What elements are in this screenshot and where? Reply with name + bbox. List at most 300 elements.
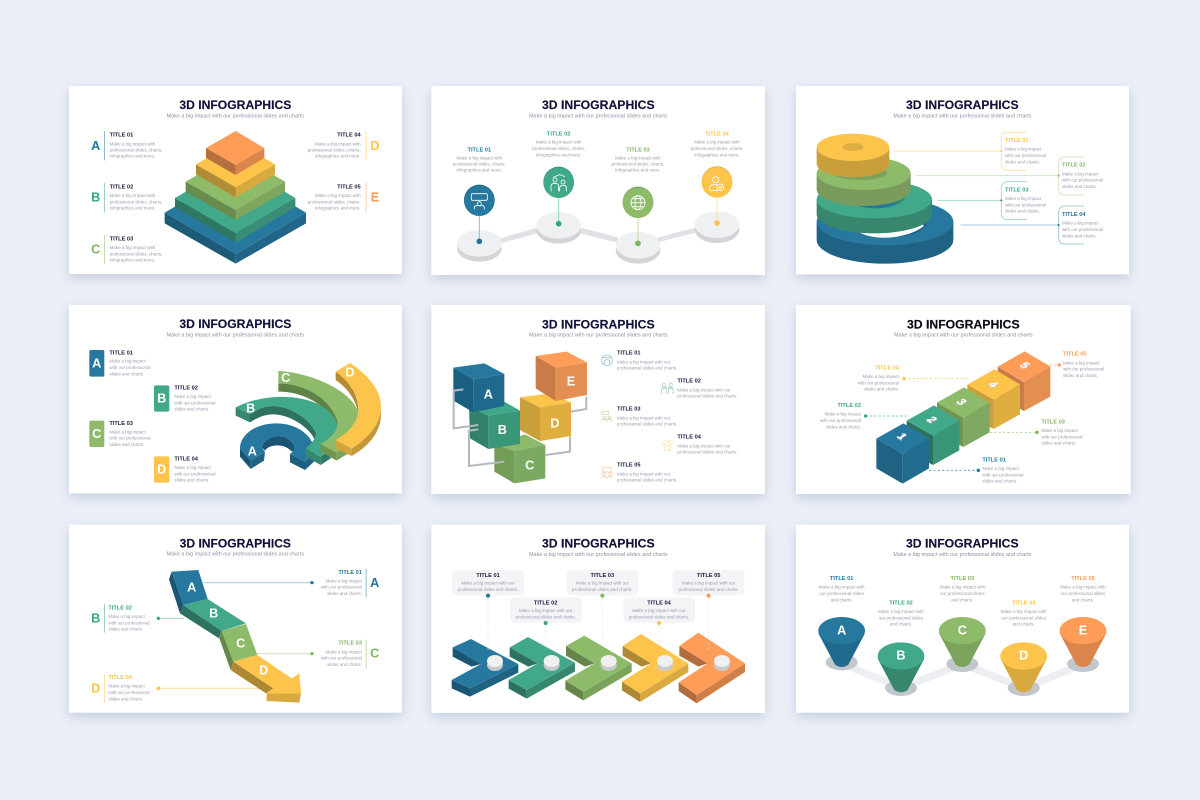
subtitle: Make a big impact with our professional slides and charts <box>167 552 304 558</box>
step 3: professional slides, charts, <box>612 162 664 167</box>
subtitle: Make a big impact with our professional slides and charts <box>529 114 668 120</box>
item 03: Make a big impact with our <box>617 415 671 420</box>
item D: D <box>370 139 380 153</box>
cube 4: 4 <box>984 381 1002 391</box>
heading: 3D INFOGRAPHICS <box>906 536 1019 550</box>
leader lines <box>158 583 312 688</box>
cube E: E <box>567 375 575 389</box>
step 4: professional slides, charts, <box>691 146 743 151</box>
cone C: and charts. <box>951 597 973 602</box>
item A <box>91 131 163 160</box>
cone B: B <box>896 649 906 663</box>
cube 3: 3 <box>953 398 970 408</box>
note 03 <box>1035 419 1082 446</box>
item 02: Make a big impact with our <box>677 387 731 392</box>
label 02 <box>510 597 582 625</box>
item C: Make a big impact <box>109 429 146 434</box>
step 2: Make a big impact with <box>536 140 582 145</box>
callout 04: TITLE 04 <box>1062 212 1086 218</box>
label 01: professional slides and charts. <box>458 587 518 592</box>
label 02: Make a big impact with our <box>519 608 573 613</box>
item 05: Make a big impact with our <box>617 472 671 477</box>
icon: team orange <box>601 467 613 478</box>
callout 04 <box>1058 206 1103 244</box>
item 03 <box>601 407 677 427</box>
note A: with our professional <box>321 585 362 590</box>
label 03: Make a big impact with our <box>576 581 630 586</box>
subtitle: Make a big impact with our professional slides and charts <box>893 552 1032 558</box>
step 1: infographics and more. <box>457 168 502 173</box>
step 4: Make a big impact with <box>694 140 740 145</box>
note 02: with our professional <box>820 418 861 423</box>
item A: professional slides, charts, <box>110 148 163 153</box>
icon: team green <box>662 383 673 394</box>
item E: TITLE 05 <box>337 185 361 191</box>
chevron 3 <box>565 636 632 700</box>
arc D: D <box>345 366 355 380</box>
cone B: TITLE 02 <box>889 600 913 606</box>
arc B: B <box>246 401 255 415</box>
icon: globe <box>631 196 645 210</box>
subtitle: Make a big impact with our professional slides and charts <box>529 333 668 339</box>
item 05: professional slides and charts. <box>617 478 677 483</box>
item E: infographics and more. <box>315 206 361 211</box>
note 04 <box>858 365 906 392</box>
note 01: TITLE 01 <box>982 457 1006 463</box>
label 03: TITLE 03 <box>591 573 614 579</box>
arc D <box>336 363 381 456</box>
step 1: TITLE 01 <box>468 147 491 153</box>
item C: infographics and more. <box>110 258 155 263</box>
item D: D <box>157 463 166 477</box>
cone B <box>878 600 924 696</box>
icon: team light green <box>601 412 612 422</box>
cone A <box>818 576 865 670</box>
note C: Make a big impact <box>326 649 363 654</box>
cone D: our professional slides <box>1001 615 1047 620</box>
heading: 3D INFOGRAPHICS <box>179 317 291 331</box>
cube A: A <box>484 388 493 402</box>
dashed guides <box>488 597 709 652</box>
callout 01: Make a big impact <box>1005 147 1042 152</box>
icon: presenter <box>471 194 487 209</box>
note 05 <box>1058 352 1104 378</box>
callout 01: with our professional <box>1005 153 1046 158</box>
callout 03 <box>1000 182 1046 220</box>
panel: floating cubes <box>431 305 765 494</box>
cone D: D <box>1019 649 1028 663</box>
item C: Make a big impact with <box>110 245 156 250</box>
connector lines <box>894 151 1059 225</box>
icon: team <box>551 175 566 191</box>
item A: Make a big impact <box>109 359 146 364</box>
item A: slides and charts. <box>109 371 144 376</box>
note 04: Make a big impact <box>863 374 900 379</box>
item 05: TITLE 05 <box>617 463 641 469</box>
note 02: Make a big impact <box>825 412 862 417</box>
step 2: professional slides, charts, <box>532 146 585 151</box>
label 03: professional slides and charts. <box>572 587 632 592</box>
cone C: C <box>958 623 967 637</box>
label 03 <box>567 570 638 598</box>
note 04: slides and charts. <box>864 387 899 392</box>
item 01 <box>602 351 677 371</box>
3D stepped pyramid <box>165 131 306 264</box>
cube 3 <box>937 387 990 447</box>
note B: slides and charts. <box>108 627 143 632</box>
note 03: with our professional <box>1041 434 1082 439</box>
note C: slides and charts. <box>327 662 362 667</box>
item B: B <box>157 392 166 406</box>
cone A: Make a big impact with <box>819 585 865 590</box>
arc A <box>240 423 314 470</box>
3D arc chart <box>236 363 381 470</box>
cone C: Make a big impact with <box>940 585 986 590</box>
cube 2: 2 <box>923 416 940 426</box>
item A: TITLE 01 <box>109 350 133 356</box>
item B: professional slides, charts, <box>110 199 163 204</box>
note 02 <box>820 403 867 429</box>
item A <box>89 350 150 377</box>
panel: numbered staircase cubes <box>796 305 1131 494</box>
note D: TITLE 04 <box>108 675 133 681</box>
cube 1 <box>876 423 929 484</box>
label 01: TITLE 01 <box>476 573 500 579</box>
icon: team yellow <box>661 440 673 451</box>
label 02: TITLE 02 <box>534 600 557 606</box>
segment A: A <box>187 581 196 595</box>
step 2: infographics and more. <box>536 152 581 157</box>
dashed leaders <box>866 365 1059 470</box>
step 3: infographics and more. <box>615 168 661 173</box>
floor bands <box>842 663 1083 688</box>
ring: green <box>817 178 932 233</box>
callout 02 <box>1058 157 1103 195</box>
note A: A <box>370 576 379 590</box>
cube 5 <box>998 351 1050 411</box>
subtitle: Make a big impact with our professional slides and charts <box>894 333 1033 339</box>
chevron 1 <box>452 639 518 697</box>
step 3: TITLE 03 <box>626 147 650 153</box>
segment B: B <box>209 606 218 620</box>
cube 1: 1 <box>893 431 911 441</box>
label 05: professional slides and charts. <box>678 587 739 592</box>
note 03: Make a big impact <box>1041 428 1078 433</box>
stacked rings chart <box>817 134 953 264</box>
item 03: professional slides and charts. <box>617 422 677 427</box>
connector brackets <box>454 389 586 466</box>
step 3: Make a big impact with <box>615 155 661 160</box>
item C: slides and charts. <box>109 442 144 447</box>
cube 4: 4 <box>984 380 1002 390</box>
item 02 <box>662 379 738 399</box>
callout 01: slides and charts. <box>1005 159 1040 164</box>
cube B: B <box>498 423 507 437</box>
note B: Make a big impact <box>108 614 145 619</box>
step 4: infographics and more. <box>694 152 740 157</box>
cone A: our professional slides <box>819 591 865 596</box>
callout 03: with our professional <box>1005 202 1046 207</box>
label 04 <box>623 597 695 625</box>
cone B: our professional slides <box>879 615 924 620</box>
item 04: professional slides and charts. <box>677 450 738 455</box>
cone B: and charts. <box>890 622 912 627</box>
note 01 <box>977 457 1023 484</box>
note 05: with our professional <box>1063 367 1104 372</box>
item 01: Make a big impact with our <box>617 359 671 364</box>
item D: professional slides, charts, <box>308 148 361 153</box>
item E: E <box>371 191 379 205</box>
cube 3: 3 <box>953 397 970 407</box>
panel: cones <box>796 525 1129 713</box>
note D: with our professional <box>108 690 149 695</box>
item 01: professional slides and charts. <box>617 366 677 371</box>
item D: Make a big impact with <box>315 141 361 146</box>
item D: with our professional <box>174 471 215 476</box>
arc A: A <box>248 444 257 458</box>
cone A: and charts. <box>831 597 853 602</box>
ring: blue <box>817 198 953 264</box>
note 05: TITLE 05 <box>1063 352 1087 358</box>
step 1: professional slides, charts, <box>453 162 506 167</box>
callout 03: Make a big impact <box>1005 196 1042 201</box>
cone C: our professional slides <box>940 591 985 596</box>
step 2: TITLE 02 <box>547 131 570 137</box>
heading: 3D INFOGRAPHICS <box>542 536 655 550</box>
note A <box>310 569 379 597</box>
item C: professional slides, charts, <box>110 251 163 256</box>
cone E: TITLE 05 <box>1071 576 1095 582</box>
item B: infographics and more. <box>110 206 155 211</box>
cone D: and charts. <box>1013 622 1035 627</box>
note 05: slides and charts. <box>1063 373 1098 378</box>
item A: TITLE 01 <box>110 133 133 139</box>
item E: Make a big impact with <box>315 193 361 198</box>
step 3 <box>612 147 664 264</box>
subtitle: Make a big impact with our professional slides and charts <box>893 113 1032 119</box>
heading: 3D INFOGRAPHICS <box>542 98 655 112</box>
note B: B <box>91 612 100 626</box>
cone E: our professional slides <box>1061 591 1106 596</box>
cone C: TITLE 03 <box>951 576 974 582</box>
cone D: TITLE 04 <box>1012 600 1036 606</box>
callout 03: TITLE 03 <box>1005 187 1029 193</box>
note D: D <box>91 681 100 695</box>
note 04: with our professional <box>858 380 899 385</box>
subtitle: Make a big impact with our professional slides and charts <box>167 113 304 119</box>
note 04: TITLE 04 <box>875 365 900 371</box>
cube 4 <box>967 369 1020 429</box>
cube staircase <box>876 351 1050 484</box>
callout 02: TITLE 02 <box>1062 163 1086 169</box>
callout 02: with our professional <box>1062 178 1103 183</box>
note 03: slides and charts. <box>1041 441 1076 446</box>
item 04: Make a big impact with our <box>677 444 731 449</box>
label 05 <box>673 570 744 598</box>
label 05: TITLE 05 <box>697 573 720 579</box>
item B <box>154 385 215 412</box>
label 01: Make a big impact with our <box>461 581 515 586</box>
label 04: TITLE 04 <box>647 600 672 606</box>
item D: TITLE 04 <box>174 456 199 462</box>
item D: TITLE 04 <box>337 133 362 139</box>
note C: C <box>370 647 379 661</box>
item C: C <box>91 242 100 256</box>
note 02: slides and charts. <box>826 424 861 429</box>
callout 03: slides and charts. <box>1005 209 1040 214</box>
cone E: Make a big impact with <box>1060 585 1106 590</box>
item 04: TITLE 04 <box>677 435 702 441</box>
note 03: TITLE 03 <box>1041 419 1065 425</box>
panel: timeline discs <box>431 86 765 275</box>
heading: 3D INFOGRAPHICS <box>906 98 1019 112</box>
note D: Make a big impact <box>108 684 145 689</box>
subtitle: Make a big impact with our professional slides and charts <box>167 332 304 338</box>
label 05: Make a big impact with our <box>682 581 736 586</box>
step 4 <box>691 131 743 243</box>
item A: Make a big impact with <box>110 141 156 146</box>
callout 01 <box>1000 132 1046 170</box>
item E <box>308 183 379 212</box>
note C <box>310 640 379 668</box>
item A: A <box>92 357 101 371</box>
note 02: TITLE 02 <box>837 403 861 409</box>
item 02: TITLE 02 <box>677 379 701 385</box>
arc C: C <box>281 371 290 385</box>
item A: infographics and more. <box>110 154 155 159</box>
cube D: D <box>550 417 560 431</box>
note 05: Make a big impact <box>1063 360 1100 365</box>
cube chart <box>453 352 587 483</box>
note C: with our professional <box>321 656 362 661</box>
item D: slides and charts. <box>174 478 209 483</box>
note 01: Make a big impact <box>982 466 1019 471</box>
heading: 3D INFOGRAPHICS <box>542 317 655 331</box>
cube C: C <box>525 459 534 473</box>
cone A: TITLE 01 <box>830 576 853 582</box>
item C: TITLE 03 <box>109 421 133 427</box>
item 04 <box>661 435 738 455</box>
label 02: professional slides and charts. <box>516 614 576 619</box>
item 05 <box>601 463 677 483</box>
note D: slides and charts. <box>108 696 143 701</box>
item C: with our professional <box>109 436 150 441</box>
item B: Make a big impact <box>174 394 211 399</box>
chevron 2 <box>509 637 575 699</box>
note 01: slides and charts. <box>982 479 1017 484</box>
arc B <box>236 397 337 465</box>
icon: team blue <box>602 355 612 366</box>
cube 5: 5 <box>1016 361 1033 371</box>
note A: TITLE 01 <box>338 570 362 576</box>
item C <box>89 421 150 447</box>
item A: A <box>91 139 100 153</box>
item B: Make a big impact with <box>110 193 156 198</box>
chevron 5 <box>679 633 745 703</box>
callout 04: Make a big impact <box>1062 221 1099 226</box>
note 01: with our professional <box>982 472 1023 477</box>
cone D: Make a big impact with <box>1001 609 1047 614</box>
item D: infographics and more. <box>315 154 361 159</box>
item E: professional slides, charts, <box>308 199 361 204</box>
label 04: professional slides and charts. <box>629 614 689 619</box>
item B: B <box>91 191 100 205</box>
callout 01: TITLE 01 <box>1005 138 1029 144</box>
step 2 <box>532 131 585 244</box>
item D: Make a big impact <box>174 465 211 470</box>
note B <box>91 604 160 633</box>
subtitle: Make a big impact with our professional slides and charts <box>529 552 668 558</box>
step 1 <box>453 147 506 262</box>
cone E: and charts. <box>1072 597 1094 602</box>
step 1: Make a big impact with <box>457 155 503 160</box>
chevron 4 <box>622 634 688 702</box>
item 02: professional slides and charts. <box>677 394 738 399</box>
item B: with our professional <box>174 400 215 405</box>
segment C: C <box>236 637 245 651</box>
item B <box>91 183 163 212</box>
panel: stacked rings <box>796 86 1129 274</box>
cone E: E <box>1079 623 1087 637</box>
callout 02: slides and charts. <box>1062 184 1097 189</box>
item D <box>154 456 215 483</box>
label 01 <box>452 570 524 598</box>
callout 02: Make a big impact <box>1062 171 1099 176</box>
item D <box>308 131 380 160</box>
heading: 3D INFOGRAPHICS <box>180 536 291 550</box>
cone E <box>1060 576 1106 672</box>
step 4: TITLE 04 <box>705 131 730 137</box>
note A: Make a big impact <box>326 579 363 584</box>
note B: TITLE 02 <box>108 606 132 612</box>
item B: TITLE 02 <box>110 185 133 191</box>
ring: yellow <box>817 134 889 177</box>
panel: zigzag arrow <box>69 525 402 713</box>
cube 1: 1 <box>893 432 911 442</box>
panel: curved arcs <box>69 305 402 493</box>
item C: TITLE 03 <box>110 236 133 242</box>
cone C <box>939 576 986 672</box>
note B: with our professional <box>108 620 149 625</box>
item B: TITLE 02 <box>174 385 198 391</box>
cube 5: 5 <box>1016 360 1033 370</box>
cone D <box>1000 600 1047 696</box>
label 04: Make a big impact with our <box>632 608 686 613</box>
note A: slides and charts. <box>327 591 362 596</box>
ring: light green <box>817 157 911 206</box>
segment D arrow: D <box>259 663 268 677</box>
item C: C <box>92 427 101 441</box>
zigzag ribbon <box>169 570 301 703</box>
arc C <box>278 371 358 461</box>
callout 04: with our professional <box>1062 227 1103 232</box>
connector bands <box>500 227 696 243</box>
item 01: TITLE 01 <box>617 351 641 357</box>
heading: 3D INFOGRAPHICS <box>907 317 1020 331</box>
heading: 3D INFOGRAPHICS <box>179 98 291 112</box>
item B: slides and charts. <box>174 407 209 412</box>
panel: chevrons <box>431 525 765 713</box>
note C: TITLE 03 <box>338 641 362 647</box>
cube 2: 2 <box>923 415 940 425</box>
cone B: Make a big impact with <box>878 609 924 614</box>
callout 04: slides and charts. <box>1062 233 1097 238</box>
cone A: A <box>837 623 846 637</box>
note D <box>91 674 160 703</box>
item A: with our professional <box>109 365 150 370</box>
item C <box>91 235 163 264</box>
panel: pyramid <box>69 86 402 274</box>
